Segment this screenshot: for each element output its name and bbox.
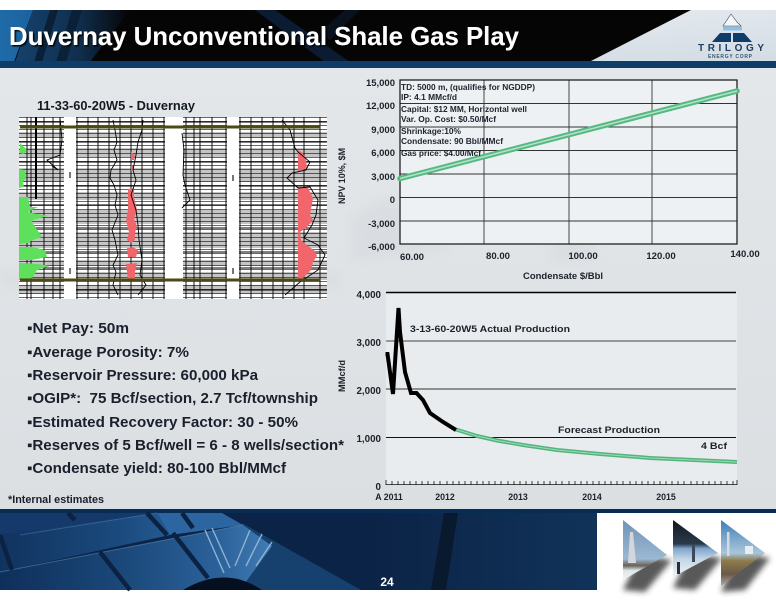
x axis labels: 60.00: [400, 252, 424, 263]
x axis labels: [375, 492, 676, 502]
assumptions box: Condensate: 90 Bbl/MMcf: [401, 136, 503, 146]
panel: reservoir facts list: [27, 321, 344, 477]
y axis title: NPV 10%, $M: [337, 148, 347, 204]
fact: recovery factor: ▪Estimated Recovery Factor: 30 - 50%: [27, 415, 298, 431]
y axis labels: 3,000: [356, 338, 382, 349]
thumbnails: field photos: [623, 520, 770, 592]
thumbnail: gas plant: [721, 520, 770, 592]
y axis labels: 15,000: [366, 78, 395, 89]
panel: well log: [19, 99, 327, 299]
forecast production label: Forecast Production: [558, 425, 660, 436]
fact: average porosity: ▪Average Porosity: 7%: [27, 345, 189, 361]
y axis labels: 2,000: [356, 386, 382, 397]
x axis title: Condensate $/Bbl: [523, 271, 603, 281]
chart: NPV vs condensate price: [337, 78, 760, 281]
assumptions box: Gas price: $4.00/Mcf: [401, 148, 481, 158]
logo: Trilogy Energy Corp: ENERGY CORP: [708, 54, 753, 60]
main pipe: [0, 525, 272, 590]
y axis title: MMcf/d: [337, 360, 347, 392]
x axis labels: 2012: [435, 492, 455, 502]
assumptions box: [401, 82, 535, 158]
plot area: [400, 80, 737, 244]
green gamma fill: [20, 143, 27, 154]
y axis labels: -3,000: [368, 219, 395, 230]
vertical strap: [431, 513, 458, 590]
red pay fill, first track: [126, 188, 137, 243]
footnote: *Internal estimates: [8, 494, 104, 506]
assumptions box: TD: 5000 m, (qualifies for NGDDP): [401, 82, 535, 92]
4 Bcf label: 4 Bcf: [701, 441, 728, 452]
fact: condensate yield: ▪Condensate yield: 80-100 Bbl/MMcf: [27, 461, 286, 477]
forecast production line: [456, 430, 737, 462]
red pay fill, last track: [298, 150, 307, 171]
well log heading: 11-33-60-20W5 - Duvernay: [37, 99, 195, 113]
x axis labels: 2015: [656, 492, 676, 502]
actual production label: 3-13-60-20W5 Actual Production: [410, 324, 570, 335]
lower-right pipe run: [240, 523, 361, 590]
logo: Trilogy Energy Corp: TRILOGY: [698, 43, 764, 54]
y axis labels: 12,000: [366, 101, 395, 112]
y axis labels: -6,000: [368, 242, 395, 253]
y axis labels: [366, 78, 395, 253]
assumptions box: IP: 4.1 MMcf/d: [401, 92, 457, 102]
straps: [0, 513, 208, 590]
thumbnail: drilling rig: [623, 520, 672, 592]
header banner: [0, 10, 776, 68]
wires: [205, 528, 272, 573]
x axis labels: 100.00: [568, 251, 598, 262]
thumbnail: snowy well site: [673, 520, 722, 590]
y axis labels: 0: [390, 195, 395, 206]
y axis labels: 6,000: [371, 148, 395, 159]
x axis labels: 2013: [508, 492, 528, 502]
x axis labels: 120.00: [646, 251, 676, 262]
logo: Trilogy Energy Corp: [698, 14, 764, 60]
chart: production forecast: [337, 290, 737, 502]
time axis ticks: [386, 480, 737, 485]
y axis labels: 3,000: [371, 172, 395, 183]
x axis labels: 80.00: [486, 251, 510, 262]
fact: reserves: ▪Reserves of 5 Bcf/well = 6 - 8 wells/section*: [27, 438, 344, 454]
page number: 24: [380, 575, 394, 589]
y axis labels: 1,000: [356, 434, 382, 445]
fact: OGIP: ▪OGIP*: 75 Bcf/section, 2.7 Tcf/township: [27, 391, 318, 407]
well log chart: [19, 117, 327, 299]
assumptions box: Var. Op. Cost: $0.50/Mcf: [401, 114, 496, 124]
assumptions box: Capital: $12 MM, Horizontal well: [401, 104, 527, 114]
x axis labels: 140.00: [730, 249, 760, 260]
footer image: pipeline: [0, 509, 776, 590]
y axis labels: 0: [376, 482, 382, 493]
y axis labels: 4,000: [356, 290, 382, 301]
fact: reservoir pressure: ▪Reservoir Pressure: 60,000 kPa: [27, 368, 259, 384]
log curves: [47, 118, 325, 295]
y axis labels: [356, 290, 382, 493]
upper pipe row: [0, 513, 157, 535]
plot area: [386, 293, 737, 485]
x axis labels: A 2011: [375, 492, 403, 502]
fact: net pay: ▪Net Pay: 50m: [27, 321, 129, 337]
x axis labels: 2014: [582, 492, 602, 502]
assumptions box: Shrinkage:10%: [401, 126, 462, 136]
x axis labels: [400, 249, 760, 263]
NPV line: [400, 91, 737, 178]
actual production line: [386, 308, 456, 430]
dark shadow: [183, 578, 262, 590]
title: Duvernay Unconventional Shale Gas Play: [9, 21, 520, 51]
y axis labels: 9,000: [371, 125, 395, 136]
